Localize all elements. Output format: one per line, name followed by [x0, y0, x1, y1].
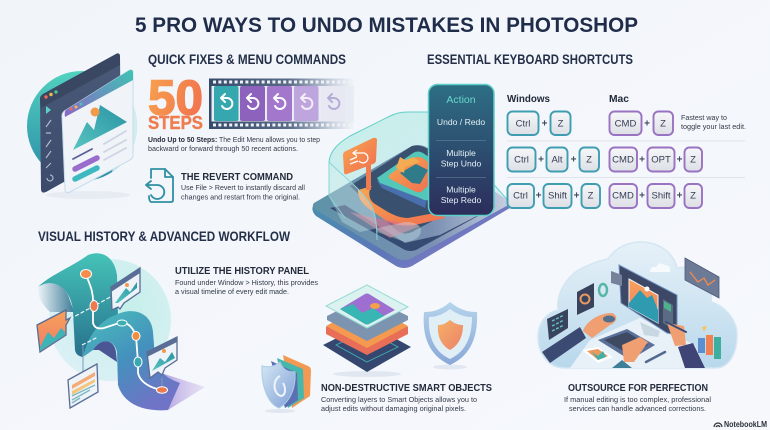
row: undo redo keys: Z [660, 118, 666, 130]
title: 5 PRO WAYS TO UNDO MISTAKES IN PHOTOSHOP [135, 14, 638, 37]
row: multiple step undo keys: Z [690, 154, 696, 166]
row: multiple step redo keys: Shift [548, 190, 567, 202]
icon: large shield [424, 302, 477, 370]
text: outsource [564, 382, 711, 413]
row: multiple step redo keys [508, 184, 702, 208]
row: undo redo keys: CMD [615, 118, 636, 130]
panel: action column: Undo / Redo [437, 117, 485, 127]
row: multiple step redo keys: + [677, 190, 683, 202]
text: history panel [175, 265, 318, 296]
text: outsource: services can handle advanced corrections. [569, 404, 706, 413]
row: multiple step redo keys: + [574, 190, 580, 202]
text: outsource: OUTSOURCE FOR PERFECTION [568, 382, 708, 394]
row: multiple step undo keys: + [538, 154, 544, 166]
text: undo up to 50 steps: Undo Up to 50 Steps: The Edit Menu allows you to step [148, 135, 320, 144]
row: multiple step undo keys: Alt [551, 154, 563, 166]
row: undo redo keys: + [542, 118, 548, 130]
panel: action column: Multiple [446, 184, 476, 194]
text: revert command: THE REVERT COMMAND [181, 171, 293, 183]
row: multiple step redo keys: Ctrl [513, 190, 528, 202]
heading: visual history: VISUAL HISTORY & ADVANCED WORKFLOW [38, 229, 290, 244]
icon: small shield with colour stack [262, 355, 311, 413]
row: multiple step undo keys: OPT [651, 154, 671, 166]
text: history panel: Found under Window > History, this provides [175, 278, 318, 287]
text: revert command: Use File > Revert to instantly discard all [181, 183, 305, 192]
text: non-destructive smart objects: adjust edits without damaging original pixels. [321, 404, 466, 413]
panel: action column: Step Redo [441, 195, 482, 205]
text: non-destructive smart objects: NON-DESTRUCTIVE SMART OBJECTS [321, 382, 492, 394]
illustration: stacked layers [323, 285, 411, 377]
row: multiple step redo keys: Z [690, 190, 696, 202]
row: multiple step redo keys: + [639, 190, 645, 202]
film strip of undo frames [209, 78, 354, 129]
row: multiple step undo keys: + [639, 154, 645, 166]
panel: action column: Multiple [446, 148, 476, 158]
panel: action column: Step Undo [441, 158, 482, 168]
text: history panel: UTILIZE THE HISTORY PANEL [175, 265, 310, 277]
row: multiple step undo keys: + [571, 154, 577, 166]
row: undo redo keys: Ctrl [516, 118, 530, 130]
note: fastest way: toggle your last edit. [681, 122, 746, 131]
text: non-destructive smart objects [321, 382, 492, 413]
panel: action column: Action [446, 94, 476, 106]
row: undo redo keys [508, 112, 673, 135]
row: multiple step redo keys: CMD [612, 190, 634, 202]
column heading: Mac: Mac [609, 93, 629, 105]
heading: keyboard shortcuts: ESSENTIAL KEYBOARD SHORTCUTS [427, 52, 633, 67]
panel: action column [428, 84, 494, 216]
note: fastest way: Fastest way to [681, 113, 727, 122]
illustration: history ribbon timeline [37, 253, 205, 410]
column heading: Windows: Windows [507, 93, 550, 105]
row: multiple step redo keys: Z [588, 190, 594, 202]
text: history panel: a visual timeline of every edit made. [175, 287, 289, 296]
row: multiple step undo keys: + [677, 154, 683, 166]
illustration: editor windows [27, 53, 137, 199]
row: multiple step redo keys: Shift [651, 190, 671, 202]
row: multiple step undo keys: CMD [612, 154, 634, 166]
note: fastest way [681, 113, 746, 131]
row: undo redo keys: + [644, 118, 650, 130]
text: revert command [181, 171, 305, 202]
big number: 50 steps: 50 [148, 72, 203, 126]
row: undo redo keys: Z [558, 118, 564, 130]
row: multiple step redo keys: + [536, 190, 542, 202]
row: multiple step undo keys: Ctrl [514, 154, 529, 166]
text: undo up to 50 steps [148, 135, 320, 153]
text: undo up to 50 steps: backward or forward through 50 recent actions. [148, 144, 298, 153]
text: revert command: changes and restart from the original. [181, 192, 300, 202]
big number: 50 steps: STEPS [148, 113, 203, 133]
heading: quick fixes: QUICK FIXES & MENU COMMANDS [148, 52, 346, 67]
row: multiple step undo keys [508, 148, 702, 172]
text: outsource: If manual editing is too complex, professional [564, 395, 711, 404]
illustration: layered undo stack [312, 112, 515, 268]
illustration: cloud workspace [538, 242, 737, 368]
text: non-destructive smart objects: Converting layers to Smart Objects allows you to [321, 395, 477, 404]
icon: revert file [146, 169, 173, 202]
row: multiple step undo keys: Z [586, 154, 592, 166]
